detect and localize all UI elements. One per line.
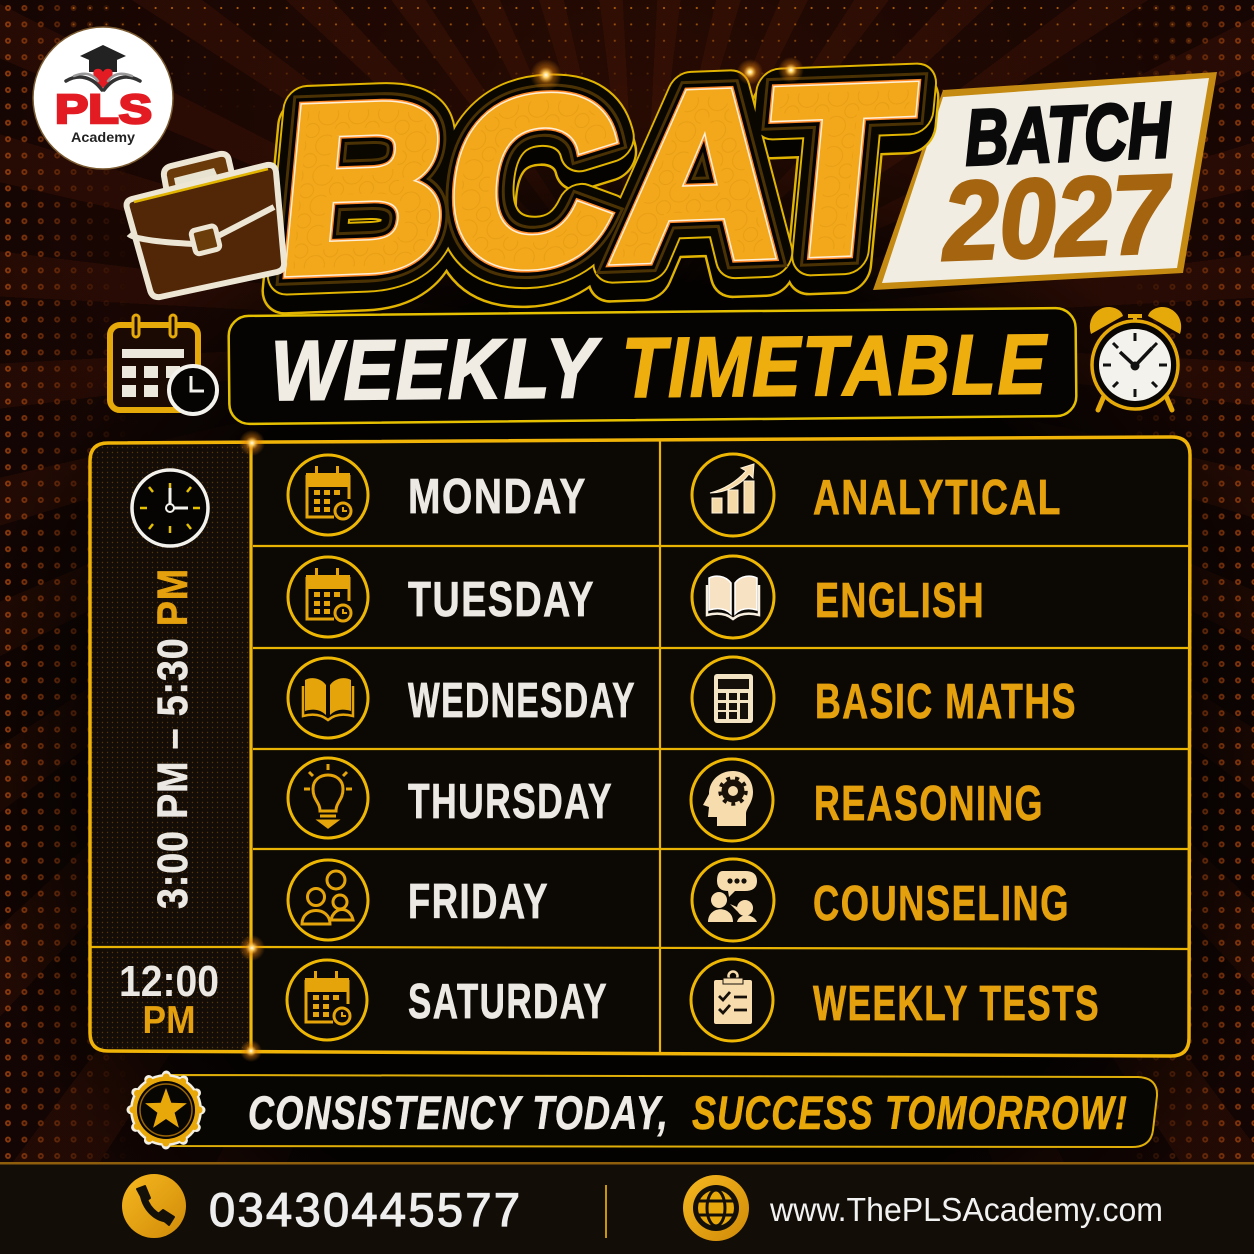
title: BCAT: BCAT bbox=[269, 34, 922, 324]
icon: briefcase bbox=[127, 154, 284, 297]
icon: calendar bbox=[306, 568, 351, 621]
subject label: REASONING bbox=[814, 777, 1044, 831]
saturday time bbox=[119, 957, 219, 1042]
row: monday bbox=[288, 455, 587, 535]
title: BCAT: BCAT bbox=[269, 34, 922, 324]
sparkles on title bbox=[530, 57, 804, 91]
icon: phone bbox=[122, 1174, 186, 1238]
day label: THURSDAY bbox=[408, 775, 613, 829]
icon: open book bbox=[707, 576, 759, 619]
motto banner bbox=[170, 1075, 1157, 1147]
day label: TUESDAY bbox=[408, 573, 595, 627]
icon: globe bbox=[683, 1175, 749, 1241]
motto white text: CONSISTENCY TODAY, bbox=[248, 1086, 669, 1139]
dot pattern: right edge bbox=[1136, 5, 1254, 1159]
row: friday bbox=[288, 860, 549, 940]
row: saturday bbox=[287, 960, 608, 1040]
heading: TIMETABLE: TIMETABLE bbox=[621, 317, 1048, 416]
icon: people bbox=[302, 871, 353, 924]
motto gold text: SUCCESS TOMORROW! bbox=[692, 1086, 1128, 1139]
title: BCAT: BCAT bbox=[269, 34, 922, 324]
icon: open book bbox=[303, 678, 353, 720]
icon: calendar bbox=[306, 466, 351, 519]
panel: timetable bbox=[90, 437, 1190, 1056]
icon: clipboard bbox=[714, 972, 752, 1024]
icon: calendar bbox=[305, 971, 350, 1024]
subject: basic maths bbox=[692, 657, 1077, 739]
subject label: ANALYTICAL bbox=[813, 471, 1062, 525]
footer bbox=[0, 1162, 1254, 1254]
subject: english bbox=[692, 556, 985, 638]
subject label: WEEKLY TESTS bbox=[813, 977, 1100, 1031]
day label: MONDAY bbox=[408, 470, 587, 524]
row: tuesday bbox=[288, 557, 595, 637]
icon: head with gear bbox=[703, 771, 753, 826]
clock icon bbox=[132, 470, 208, 546]
heading: WEEKLY: WEEKLY bbox=[270, 321, 603, 419]
time column background bbox=[90, 443, 252, 1051]
day label: FRIDAY bbox=[408, 875, 549, 929]
row: thursday bbox=[288, 758, 613, 838]
saturday time: PM bbox=[142, 999, 196, 1042]
title: BCAT: BCAT bbox=[269, 34, 922, 324]
dot pattern: top bbox=[72, 6, 1190, 108]
subject: weekly tests bbox=[691, 959, 1100, 1041]
logo: PLS Academy bbox=[33, 27, 173, 169]
subject: counseling bbox=[692, 859, 1070, 941]
dot pattern: left edge bbox=[5, 5, 121, 1160]
title: BCAT: BCAT bbox=[268, 49, 920, 339]
saturday time: 12:00 bbox=[119, 957, 219, 1006]
logo subtitle: Academy bbox=[71, 129, 135, 145]
title: BCAT: BCAT bbox=[269, 34, 922, 324]
icon: light bulb bbox=[304, 764, 352, 827]
icon: growth chart bbox=[710, 464, 754, 513]
subject: reasoning bbox=[691, 759, 1044, 841]
year 2027: 2027 bbox=[939, 151, 1175, 284]
icon: counseling chat bbox=[708, 871, 757, 922]
day label: WEDNESDAY bbox=[408, 674, 636, 728]
logo book bbox=[66, 74, 140, 90]
title: BCAT: BCAT bbox=[268, 49, 920, 339]
batch label: BATCH bbox=[963, 85, 1174, 182]
logo cap bbox=[80, 45, 126, 72]
divider bbox=[605, 1185, 607, 1238]
phone number: 03430445577 bbox=[209, 1183, 520, 1236]
logo heart bbox=[93, 69, 113, 88]
subject label: COUNSELING bbox=[813, 877, 1070, 931]
subject label: ENGLISH bbox=[815, 574, 985, 628]
icon: star badge bbox=[130, 1074, 202, 1146]
sparkles on table bbox=[239, 430, 265, 1062]
vertical time label: 3:00 PM – 5:30 PM bbox=[149, 568, 197, 909]
icon: alarm clock bbox=[1090, 307, 1181, 410]
website: www.ThePLSAcademy.com bbox=[769, 1191, 1163, 1228]
subject label: BASIC MATHS bbox=[815, 675, 1077, 729]
subject: analytical bbox=[692, 454, 1062, 536]
panel: batch 2027 bbox=[873, 72, 1217, 290]
icon: calculator bbox=[714, 674, 753, 723]
logo wordmark: PLS bbox=[55, 86, 152, 132]
heading banner: weekly timetable bbox=[229, 308, 1076, 424]
title: BCAT: BCAT bbox=[269, 34, 922, 324]
title: BCAT: BCAT bbox=[269, 34, 922, 324]
day label: SATURDAY bbox=[408, 975, 608, 1029]
row: wednesday bbox=[288, 658, 636, 738]
icon: calendar with clock bbox=[110, 315, 217, 414]
